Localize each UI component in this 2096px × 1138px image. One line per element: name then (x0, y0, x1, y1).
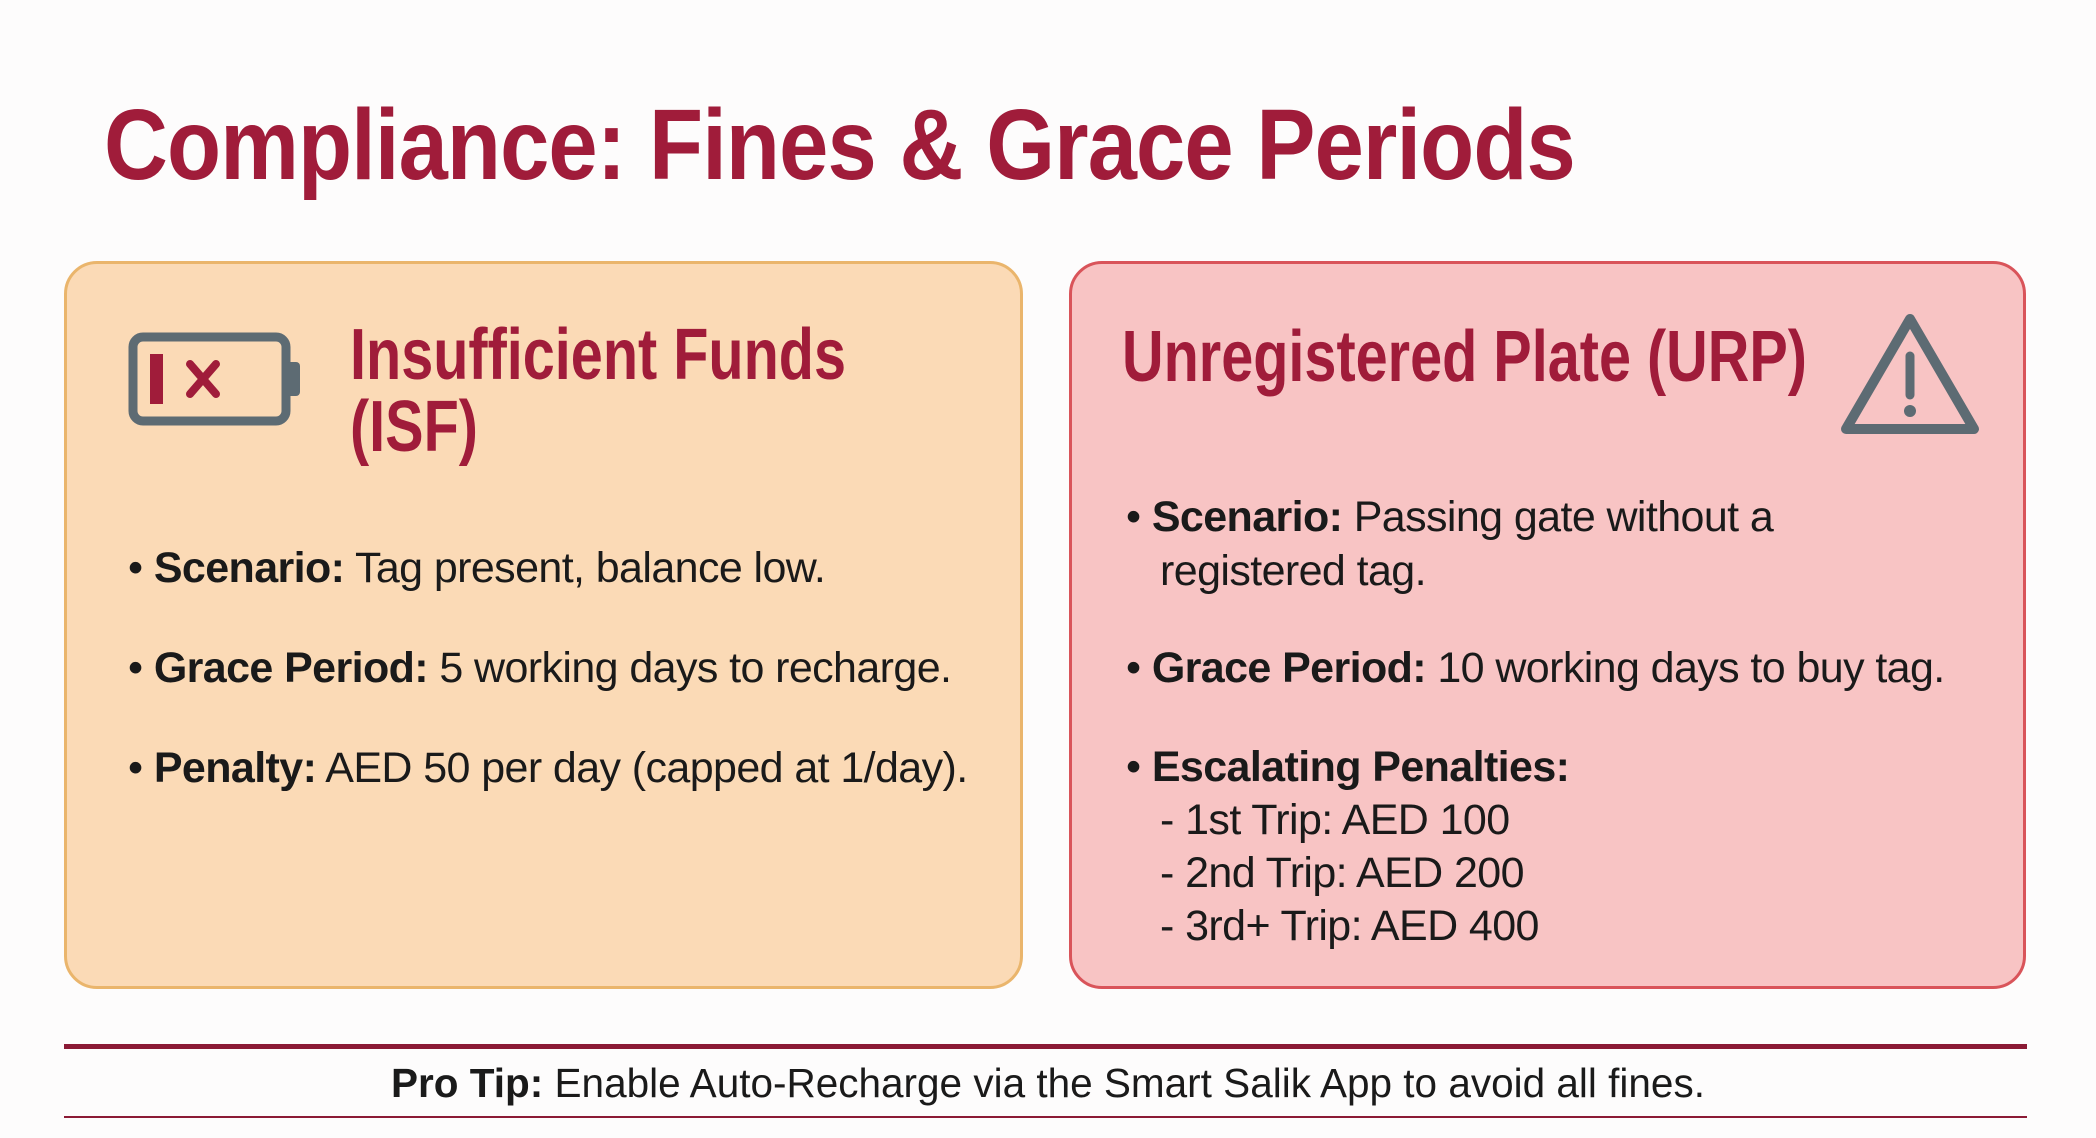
heading: insufficient funds (350, 315, 846, 467)
bullet: escalating penalties: - 2nd Trip: AED 200 (1160, 849, 1524, 897)
bullet list: URP (1126, 493, 1945, 950)
bullet: grace period: • Grace Period: 10 working days to buy tag. (1126, 644, 1945, 692)
heading: unregistered plate: Unregistered Plate (URP) (1122, 317, 1807, 397)
heading: insufficient funds: Insufficient Funds (350, 315, 846, 395)
bullet: escalating penalties: - 1st Trip: AED 100 (1160, 796, 1510, 844)
bullet: escalating penalties: - 3rd+ Trip: AED 400 (1160, 902, 1539, 950)
bullet: scenario: registered tag. (1160, 547, 1426, 595)
panel: unregistered plate (1069, 261, 2026, 989)
bullet: escalating penalties: • Escalating Penalties: (1126, 743, 1569, 791)
bullet: penalty: • Penalty: AED 50 per day (capped at 1/day). (128, 744, 968, 792)
bullet: scenario (1126, 493, 1774, 595)
bullet: grace period: • Grace Period: 5 working days to recharge. (128, 644, 951, 692)
heading: insufficient funds: (ISF) (350, 387, 478, 467)
panel: insufficient funds (64, 261, 1023, 989)
bullet list: ISF (128, 544, 968, 792)
pro tip footer: Pro Tip: Enable Auto-Recharge via the Smart Salik App to avoid all fines. (391, 1060, 1705, 1106)
icon: warning triangle (1841, 314, 1979, 434)
title: Compliance: Fines & Grace Periods (104, 89, 1575, 201)
icon: empty battery (128, 332, 300, 426)
bullet: escalating penalties (1126, 743, 1569, 950)
bullet: scenario: • Scenario: Tag present, balance low. (128, 544, 825, 592)
bullet: scenario: • Scenario: Passing gate without a (1126, 493, 1773, 541)
